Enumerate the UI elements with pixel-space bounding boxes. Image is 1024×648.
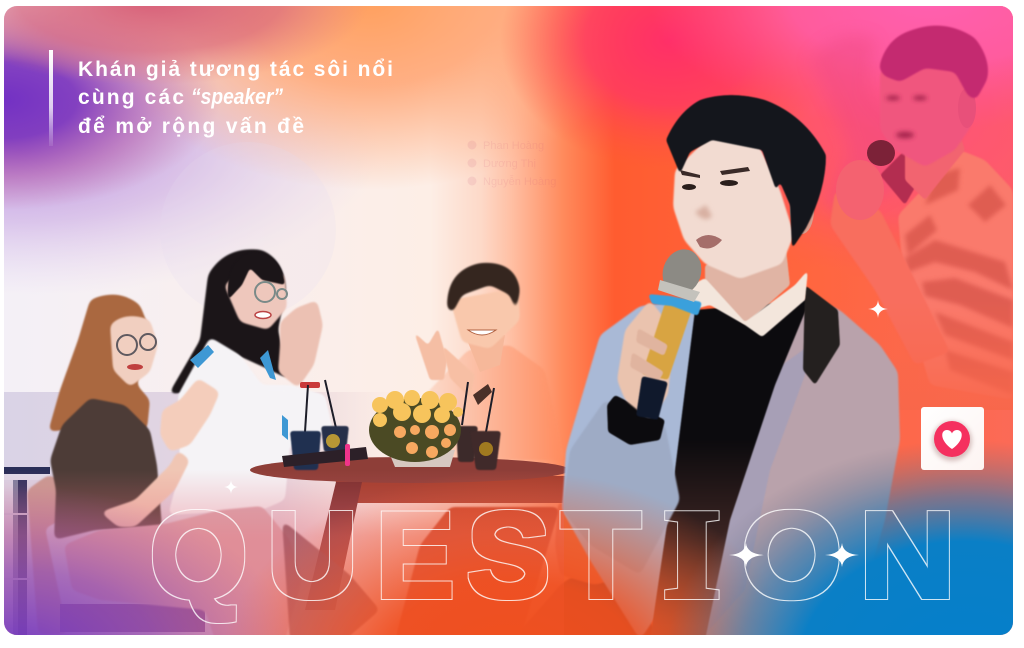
microphone (867, 140, 895, 166)
hair (48, 295, 150, 432)
sleeve dark (880, 153, 914, 204)
right hand (442, 345, 475, 398)
arm sleeve left (562, 400, 680, 575)
cup right (470, 431, 501, 470)
quote text: để mở rộng vấn đề (78, 115, 304, 138)
black cuff (607, 395, 665, 445)
wrist band (300, 382, 320, 388)
body (425, 345, 565, 460)
striped shirt (898, 150, 1013, 400)
shirt fade (910, 329, 1013, 410)
white shirt (168, 337, 333, 515)
faded backdrop circle (160, 142, 336, 318)
table top (250, 457, 570, 483)
flower pot (388, 450, 455, 467)
bangs (227, 258, 286, 298)
stripes (905, 168, 1013, 395)
left woman with brown hair (27, 295, 302, 640)
right man clapping (414, 263, 565, 460)
neck (705, 240, 790, 325)
table leg (305, 482, 362, 610)
faded backdrop names: Dương Thị (483, 158, 536, 170)
table underside (332, 476, 570, 503)
inner lining (700, 345, 810, 640)
eyes (682, 180, 738, 190)
letter E: E (376, 488, 454, 624)
mic blue ring (648, 294, 702, 316)
glasses (117, 334, 156, 355)
jacket left (562, 300, 700, 640)
mouth (468, 330, 496, 335)
ear (964, 97, 976, 128)
cup right back (456, 426, 478, 462)
quote text (78, 58, 393, 138)
black polo (650, 300, 810, 640)
letter Q: Q (150, 488, 247, 624)
face (224, 262, 287, 330)
mic base (636, 376, 668, 420)
faded backdrop names: Nguyễn Hoàng (483, 175, 556, 188)
straws (305, 380, 494, 432)
black lapel (803, 285, 840, 385)
glasses (255, 282, 287, 302)
cup back (321, 426, 349, 452)
hair (666, 95, 826, 249)
neck (465, 335, 505, 372)
forearm (830, 190, 950, 365)
mouth (127, 364, 143, 370)
face (110, 316, 158, 387)
jacket right (690, 295, 900, 640)
fingers (630, 328, 668, 382)
mouth (255, 312, 271, 318)
faded backdrop names: Phan Hoàng (483, 140, 544, 152)
faded speaker with microphone (826, 24, 1013, 410)
facial features (886, 96, 927, 138)
face (450, 288, 520, 349)
hand (160, 378, 220, 452)
quote accent bar (49, 50, 53, 146)
mic head (657, 244, 707, 300)
letter O: O (742, 486, 842, 623)
heart badge (921, 407, 984, 470)
faded backdrop names (468, 140, 556, 188)
letter I: I (662, 483, 722, 625)
arm (100, 450, 190, 527)
sparkle stars (224, 300, 888, 567)
title outline QUESTION (150, 483, 956, 625)
shadow between legs (282, 520, 380, 640)
mic band (658, 280, 700, 302)
letter U: U (267, 488, 358, 624)
microphone on table (282, 447, 368, 467)
cup left (290, 431, 321, 470)
chair (27, 475, 205, 634)
watch (473, 384, 492, 405)
bottom seated figure profile (556, 503, 652, 635)
hair (168, 249, 290, 395)
yellow flowers (372, 390, 463, 427)
middle woman with long black hair (168, 249, 333, 515)
mic body (642, 303, 692, 380)
main speaker with golden microphone (562, 95, 900, 640)
left hand (414, 328, 447, 380)
neck (904, 142, 964, 198)
hand (617, 300, 674, 420)
face (880, 65, 972, 167)
mouth (696, 235, 722, 248)
letter N: N (859, 488, 956, 624)
pants (64, 506, 302, 640)
table with drinks and flowers (250, 380, 570, 640)
nose shadow (695, 205, 712, 219)
hair (879, 26, 988, 100)
letter S: S (467, 487, 550, 624)
face (673, 134, 794, 279)
dark trousers under table (395, 507, 560, 640)
eyebrows (680, 167, 750, 178)
leaves (369, 398, 461, 462)
ear (790, 186, 814, 234)
quote text: cùng các (78, 86, 184, 109)
hair (447, 263, 520, 314)
brown shirt (50, 398, 162, 540)
quote text: “speaker” (191, 84, 283, 109)
letter T: T (561, 487, 641, 623)
blue shirt stripes (190, 345, 214, 368)
hand (836, 160, 884, 220)
collar (692, 270, 808, 337)
quote text: Khán giả tương tác sôi nổi (78, 58, 393, 81)
clapping hands (278, 300, 323, 388)
railing background (4, 467, 50, 635)
foliage behind speaker (826, 36, 886, 192)
